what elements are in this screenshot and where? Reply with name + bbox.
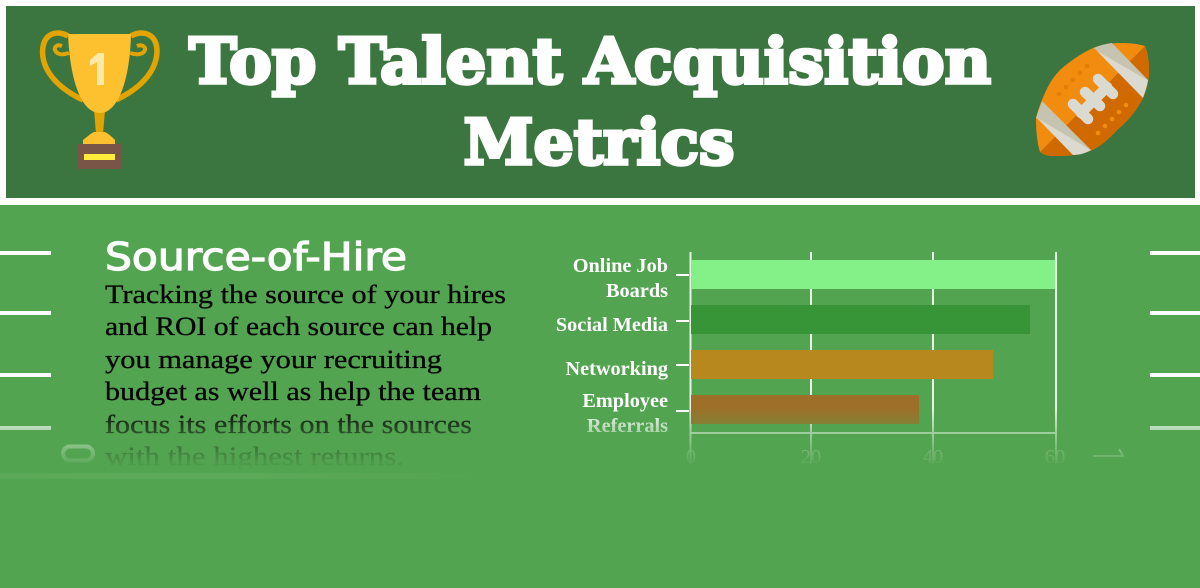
axis numbers (686, 446, 1065, 468)
category labels: Networking (565, 358, 668, 380)
icon: trophy (42, 33, 157, 169)
yard lines (0, 251, 1200, 430)
bottom fade (0, 408, 1200, 478)
axis arrow (1093, 449, 1123, 456)
axis numbers: 40 (923, 446, 943, 468)
text block: description: you manage your recruiting (105, 344, 442, 374)
category labels (556, 255, 668, 437)
text block: description: budget as well as help the team (105, 376, 481, 406)
heading: Source-of-Hire: Source-of-Hire (105, 235, 407, 279)
title: Top Talent Acquisition (189, 24, 991, 98)
bar: Social Media (691, 305, 1030, 334)
axis numbers: 60 (1045, 446, 1065, 468)
axis numbers: 0 (686, 446, 696, 468)
text block: description: Tracking the source of your hires (105, 279, 506, 309)
bar: Networking (691, 350, 993, 379)
title: Metrics (464, 105, 734, 179)
icon: football (1036, 43, 1149, 156)
header banner (0, 0, 1200, 205)
text block: description (105, 279, 506, 471)
text block: description: with the highest returns. (105, 441, 404, 471)
bar: Online Job Boards (691, 260, 1055, 289)
category ticks (676, 274, 689, 412)
title (189, 24, 991, 179)
field streak (0, 473, 1200, 479)
bar: Employee Referrals (691, 395, 919, 424)
text block: description: and ROI of each source can help (105, 311, 492, 341)
text block: description: focus its efforts on the sources (105, 409, 472, 439)
axis numbers: 20 (801, 446, 821, 468)
category labels: Online Job (573, 255, 668, 277)
category labels: Referrals (587, 415, 668, 437)
bar chart: source of hire (556, 252, 1123, 468)
category labels: Employee (582, 390, 668, 412)
category labels: Social Media (556, 314, 668, 336)
category labels: Boards (606, 280, 668, 302)
yard number zero (63, 446, 93, 460)
